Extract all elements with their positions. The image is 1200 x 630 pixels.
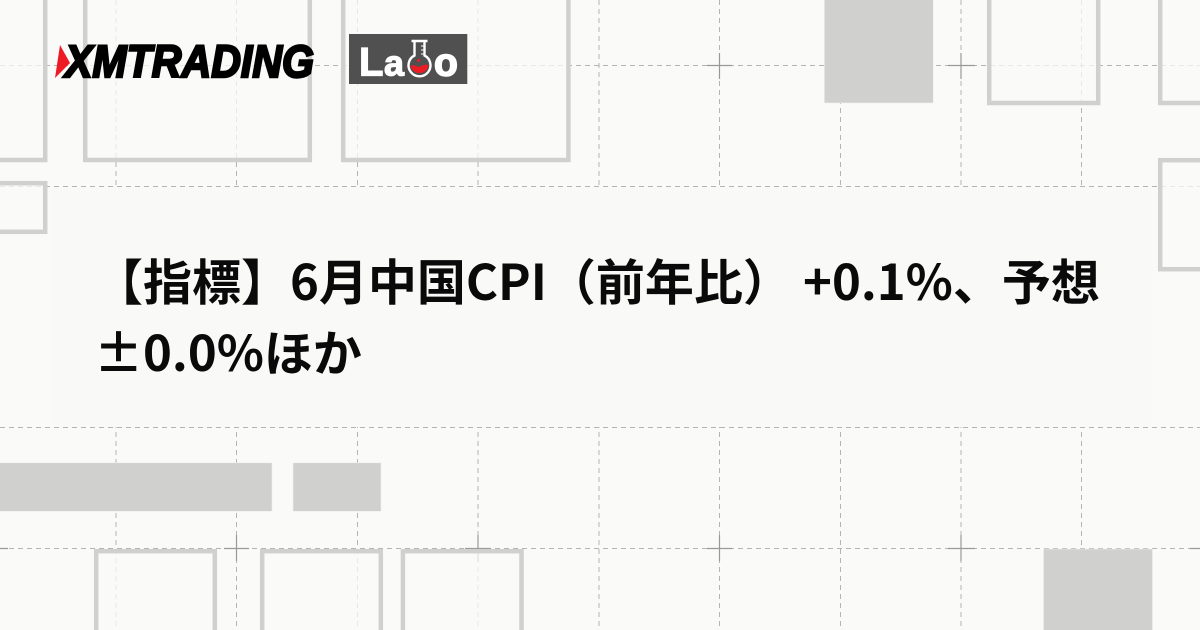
logo: Labo	[349, 34, 467, 84]
logo: XMTRADING: XMTRADING	[62, 36, 314, 87]
title: ±0.0%ほか	[94, 315, 362, 386]
logo: Labo: a	[384, 42, 405, 84]
logo: Labo: L	[359, 40, 383, 84]
title: 【指標】6月中国CPI（前年比） +0.1%、予想	[94, 244, 1100, 315]
icon: flask	[408, 41, 431, 76]
title	[94, 244, 1100, 386]
logo: Labo: o	[434, 42, 458, 84]
title panel	[52, 187, 1152, 427]
